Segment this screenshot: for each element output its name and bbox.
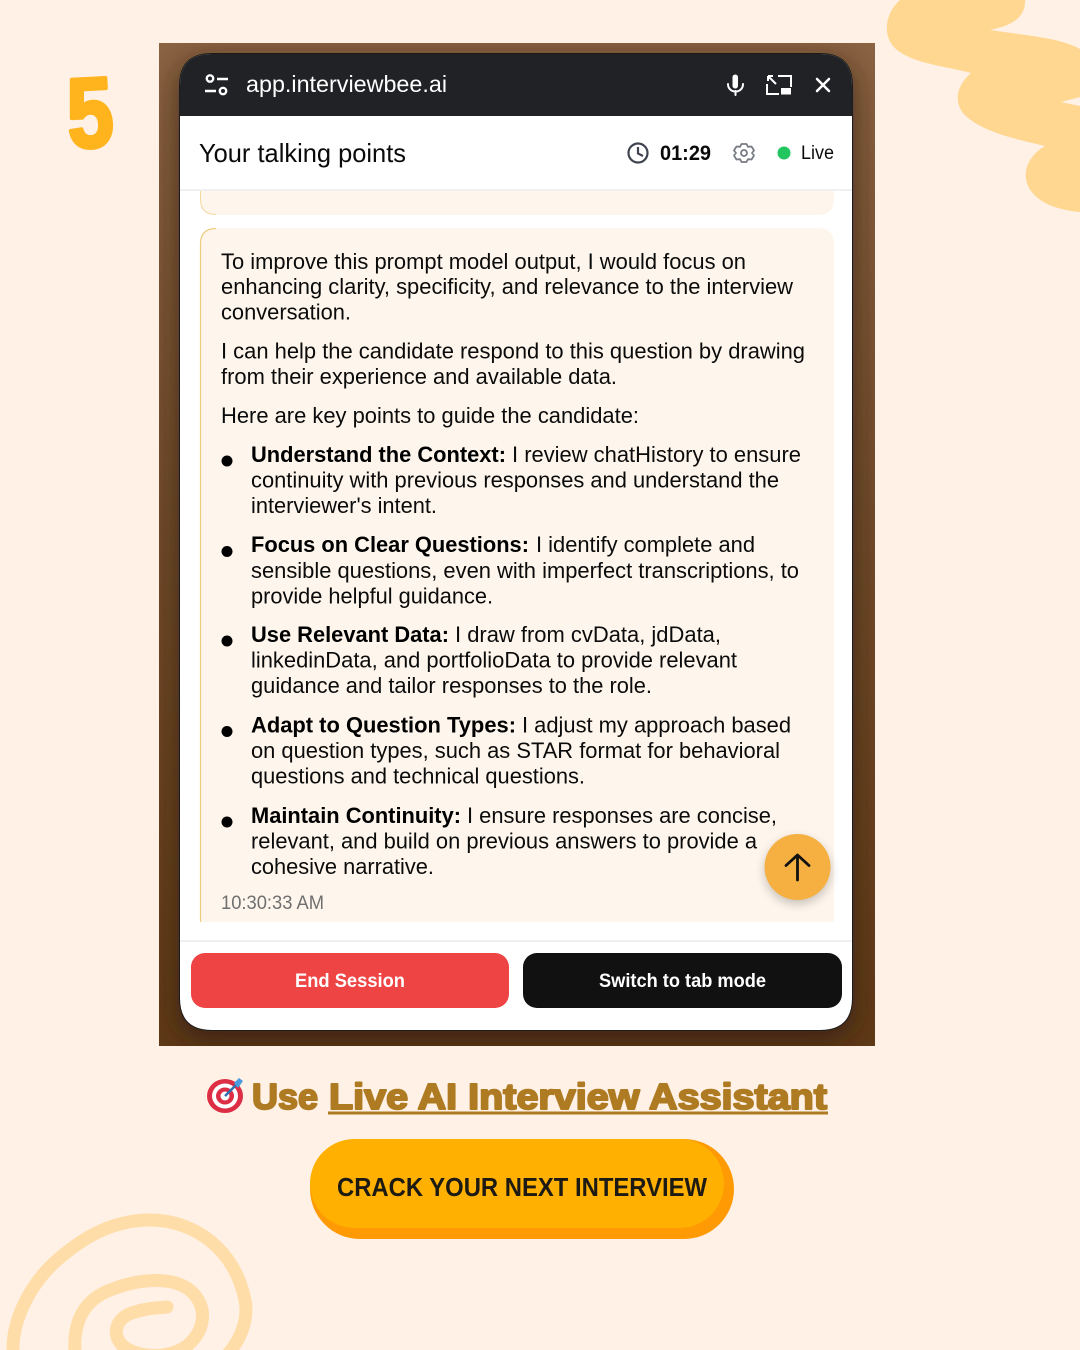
button: end session: End Session — [295, 971, 405, 992]
icon: microphone — [728, 74, 743, 95]
bullet: maintain continuity: relevant, and build on previous answers to provide a — [251, 828, 757, 854]
heading text: Use — [252, 1076, 318, 1117]
bullet: adapt to question types: on question types, such as STAR format for behavioral — [251, 738, 780, 763]
intro paragraph: enhancing clarity, specificity, and relevance to the interview — [221, 274, 794, 299]
intro paragraph: To improve this prompt model output, I would focus on — [221, 249, 746, 274]
heading link text: Live AI Interview Assistant — [329, 1076, 827, 1117]
button: switch to tab mode: Switch to tab mode — [599, 971, 766, 992]
bullet: focus on clear questions: Focus on Clear Questions: — [251, 532, 529, 557]
scroll up button — [764, 834, 830, 904]
icon: close — [817, 79, 829, 91]
decorative blob: top right — [887, 0, 1080, 212]
icon: gear — [734, 144, 754, 162]
url: app.interviewbee.ai — [246, 71, 447, 97]
bullet: maintain continuity: Maintain Continuity: — [251, 803, 461, 828]
bullet: use relevant data: I draw from cvData, jdData, — [455, 622, 721, 647]
icon: settings sliders — [205, 75, 228, 94]
icon: clock — [628, 144, 648, 162]
bullet: focus on clear questions: sensible questions, even with imperfect transcriptions, to — [251, 558, 799, 583]
second paragraph: from their experience and available data. — [221, 364, 617, 389]
bullet: focus on clear questions: provide helpful guidance. — [251, 584, 493, 608]
button: end session — [191, 953, 509, 1008]
bullet: understand the context: I review chatHistory to ensure — [512, 442, 801, 467]
bullet: use relevant data: Use Relevant Data: — [251, 622, 449, 647]
bullet: maintain continuity — [222, 807, 775, 874]
step number: 5 — [64, 56, 116, 169]
third paragraph: Here are key points to guide the candidate: — [221, 403, 639, 428]
intro paragraph — [222, 253, 793, 320]
bullet: understand the context — [222, 446, 800, 513]
call to action button: CRACK YOUR NEXT INTERVIEW — [337, 1174, 708, 1202]
bullet: adapt to question types: questions and technical questions. — [251, 764, 585, 788]
icon: target with dart — [207, 1078, 243, 1113]
call to action heading — [207, 1076, 828, 1117]
status: live: Live — [801, 142, 834, 164]
app window — [179, 53, 853, 1031]
window title bar — [180, 54, 852, 116]
bullet: focus on clear questions: I identify complete and — [536, 532, 755, 557]
bullet: understand the context: continuity with previous responses and understand the — [251, 468, 779, 492]
timestamp: 10:30:33 AM — [221, 893, 324, 914]
bullet: understand the context: interviewer's intent. — [251, 493, 437, 518]
call to action button — [310, 1139, 734, 1239]
timer: 01:29 — [660, 142, 711, 165]
intro paragraph: conversation. — [221, 300, 351, 324]
session header — [180, 138, 852, 191]
bullet: maintain continuity: I ensure responses are concise, — [467, 803, 777, 828]
bullet: use relevant data — [222, 622, 738, 698]
icon: picture in picture — [767, 76, 791, 94]
bullet: adapt to question types: I adjust my approach based — [522, 712, 791, 738]
previous message card — [200, 191, 834, 215]
second paragraph — [221, 338, 805, 389]
status: live — [778, 145, 834, 160]
bullet: adapt to question types — [222, 712, 791, 788]
bullet: adapt to question types: Adapt to Question Types: — [251, 712, 516, 738]
bullet: use relevant data: linkedinData, and portfolioData to provide relevant — [251, 648, 738, 672]
bullet: maintain continuity: cohesive narrative. — [251, 854, 434, 879]
message card — [200, 228, 834, 922]
decorative spiral: bottom left — [13, 1220, 246, 1350]
bullet: use relevant data: guidance and tailor responses to the role. — [251, 673, 652, 698]
bullet: understand the context: Understand the Context: — [251, 442, 506, 467]
second paragraph: I can help the candidate respond to this question by drawing — [221, 338, 805, 364]
screenshot panel: brown frame — [159, 43, 875, 1046]
button: switch to tab mode — [523, 953, 842, 1008]
heading: Your talking points — [199, 138, 406, 168]
bullet: focus on clear questions — [222, 532, 799, 608]
